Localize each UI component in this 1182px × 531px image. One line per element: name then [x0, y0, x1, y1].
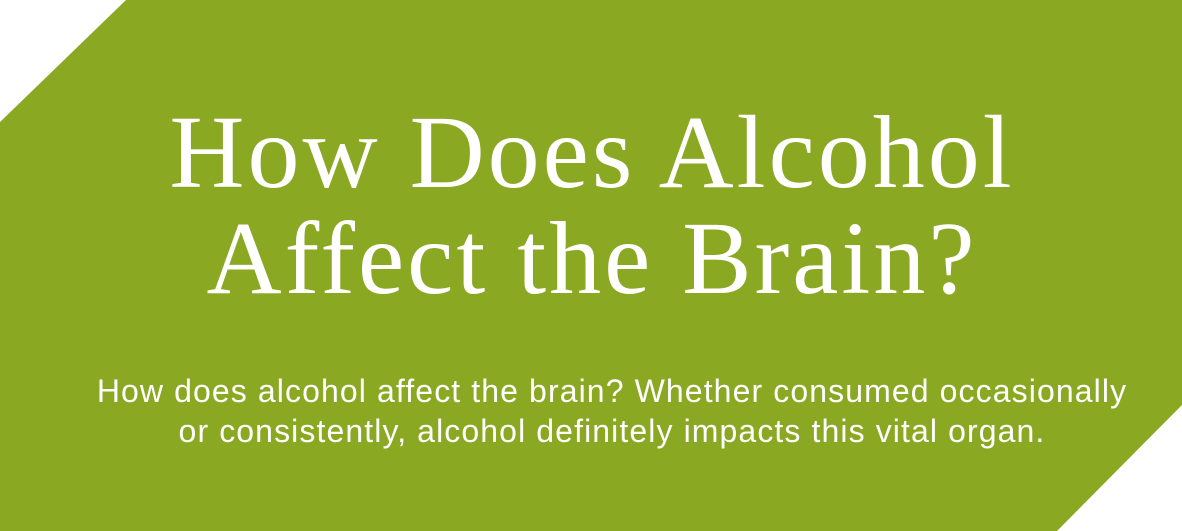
subtitle: [97, 373, 1127, 449]
title: How Does Alcohol: [169, 95, 1015, 210]
title: [169, 95, 1015, 316]
subtitle: or consistently, alcohol definitely impacts this vital organ.: [179, 413, 1045, 449]
title: Affect the Brain?: [206, 201, 977, 316]
subtitle: How does alcohol affect the brain? Whether consumed occasionally: [97, 373, 1127, 409]
